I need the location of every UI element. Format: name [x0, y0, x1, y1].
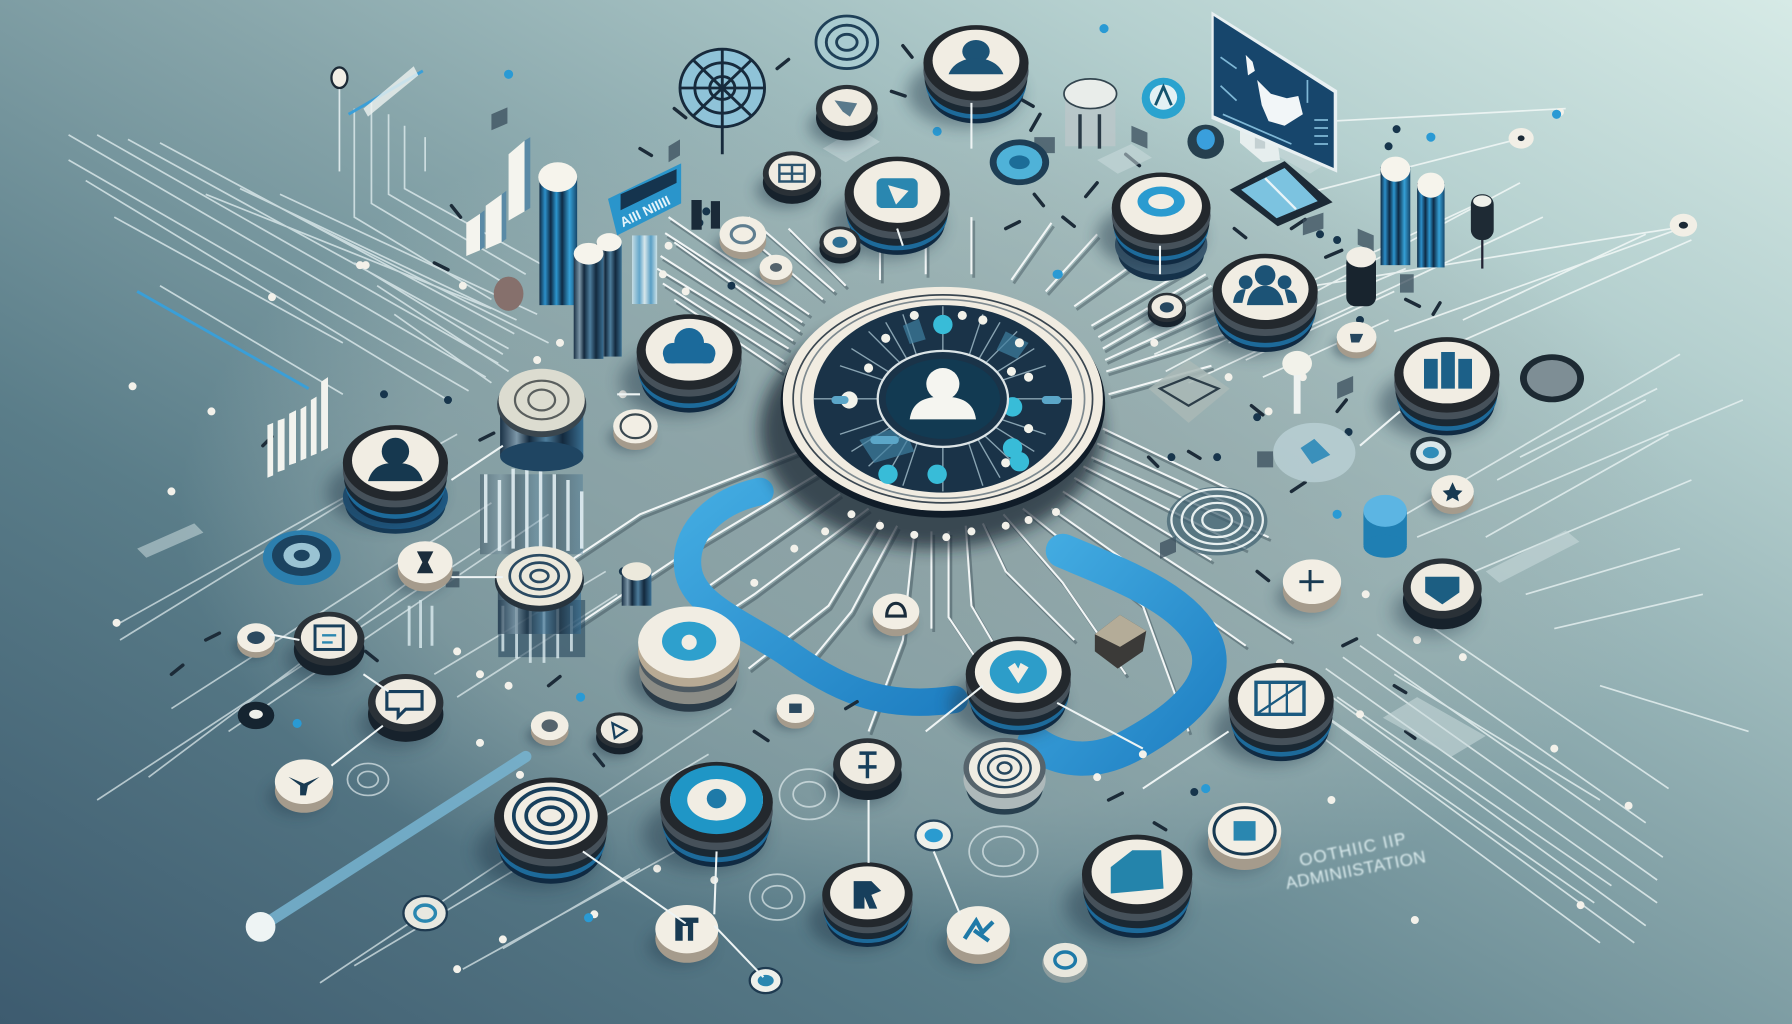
blue sign panel — [608, 163, 681, 235]
blue disc near top — [990, 139, 1049, 185]
hub shadow — [760, 311, 1103, 549]
badge: blue ring — [643, 762, 773, 871]
badge: chat card — [359, 674, 443, 747]
pin node right — [1282, 351, 1312, 414]
tall blue cylinder — [538, 162, 577, 305]
pin node top-left — [331, 67, 347, 171]
badge: heart icon — [950, 637, 1071, 738]
bar chart: white bars upper-left — [466, 137, 530, 256]
dark capsule right — [1471, 194, 1494, 269]
hub outer ring — [781, 289, 1105, 518]
puck: left of hub — [608, 409, 658, 452]
puck: dome — [867, 594, 919, 638]
badge: people — [1197, 254, 1318, 355]
dark isometric box — [1095, 615, 1146, 669]
blue ribbon path — [687, 491, 1209, 759]
circuit lines: lower-left bundle — [97, 434, 731, 983]
puck: small mid — [772, 694, 814, 730]
circuit lines: hub shadow traces — [539, 221, 1294, 735]
puck: runner — [939, 906, 1010, 966]
puck: fork — [268, 759, 333, 815]
puck: hourglass — [391, 541, 453, 593]
circuit lines: blue accent left — [137, 71, 423, 389]
right cylinder pair — [1381, 157, 1445, 267]
vertical bar clusters — [480, 463, 583, 554]
puck: framed blue — [1199, 803, 1281, 872]
central hub — [760, 287, 1105, 549]
badge: shield — [1394, 558, 1482, 635]
hub dark dial — [814, 305, 1072, 493]
badge: cloud — [621, 314, 742, 416]
pale light column — [632, 235, 657, 304]
puck: bars — [648, 905, 718, 965]
puck: angled icon — [1276, 559, 1341, 615]
badge: mail small — [809, 85, 878, 145]
puck: ring right small — [1332, 322, 1376, 360]
badge: silver bar stack lower — [495, 546, 584, 634]
puck: top small right — [1143, 293, 1186, 330]
badge: concentric silver — [963, 738, 1046, 815]
small silver drums — [622, 562, 651, 606]
blue bead near monitor — [1187, 125, 1224, 159]
circuit lines: lower-right bundle — [1309, 354, 1749, 943]
end node far right — [1670, 214, 1697, 237]
swirl disc right — [1167, 487, 1267, 555]
cylinder pair — [574, 233, 622, 359]
badge connector lines — [270, 103, 1400, 977]
faint disc cluster right — [1273, 423, 1355, 482]
badge: person top — [907, 25, 1029, 127]
puck: far left — [233, 623, 275, 659]
badge: concentric rings — [477, 778, 608, 887]
hub core — [878, 351, 1008, 447]
silver cylinder top — [1064, 79, 1117, 149]
ring: center bottom — [915, 821, 952, 850]
badge: staff icon — [825, 738, 902, 805]
badge: pentagon — [1065, 835, 1192, 941]
blue badge top — [1142, 78, 1185, 119]
puck: dark triangle — [591, 712, 643, 757]
blue cylinder right — [1363, 495, 1407, 558]
ring icon top — [816, 16, 878, 69]
white tilted bars top-left — [363, 66, 418, 117]
mesh disc — [1520, 354, 1584, 402]
badge: silver bar stack upper — [497, 369, 586, 471]
brown capsule — [494, 277, 523, 311]
puck: star — [1426, 475, 1474, 516]
circuit lines: hub radial traces — [537, 217, 1291, 731]
ring: far left dark — [238, 702, 274, 729]
badge: buildings — [1378, 337, 1499, 439]
ring: right blue small — [1410, 437, 1451, 471]
monitor with map — [1211, 11, 1337, 173]
faint swirl bottom — [347, 763, 1038, 920]
circuit lines: upper-right bundle — [1154, 109, 1691, 383]
badge: figure bottom — [808, 862, 913, 950]
badge: form card — [286, 612, 364, 680]
dark capsule mid right — [1346, 247, 1376, 306]
tablet — [1230, 161, 1333, 226]
blue sign panel: AIII NIIIII — [618, 193, 673, 230]
puck: small center bottom — [526, 711, 569, 747]
faint isometric panel — [1149, 360, 1230, 423]
blurred handwritten caption: ADMINIISTATION — [1284, 846, 1428, 893]
end node upper right — [1509, 128, 1534, 149]
circuit lines: upper-left bundle — [69, 101, 549, 402]
scattered node dots — [117, 78, 1686, 969]
puck: upper small — [714, 216, 766, 261]
badge: square split — [756, 151, 821, 208]
puck: upper small three — [756, 255, 792, 286]
small clutter components around the network — [137, 46, 1579, 830]
ring: bottom left — [403, 896, 447, 930]
badge: person left — [327, 425, 448, 534]
light-blue wand with end dot — [246, 757, 526, 942]
bar chart: white bars left — [267, 377, 328, 478]
crosshair globe icon — [680, 49, 765, 154]
badge: blue circle stack — [628, 606, 740, 712]
puck: upper small two — [815, 227, 861, 266]
hub pin dots — [825, 512, 1056, 537]
badge: chevron — [829, 157, 950, 258]
badge: crate — [1213, 663, 1334, 765]
icon: central user — [910, 368, 976, 419]
small dark connector icons — [691, 200, 720, 230]
blue swirl disc left — [263, 530, 341, 585]
badge: stacked disc right — [1097, 173, 1211, 281]
blurred handwritten caption: OOTHIIC IIP — [1297, 828, 1409, 870]
ring: bottom — [750, 968, 782, 993]
ring: bottom swirl — [1042, 943, 1088, 983]
